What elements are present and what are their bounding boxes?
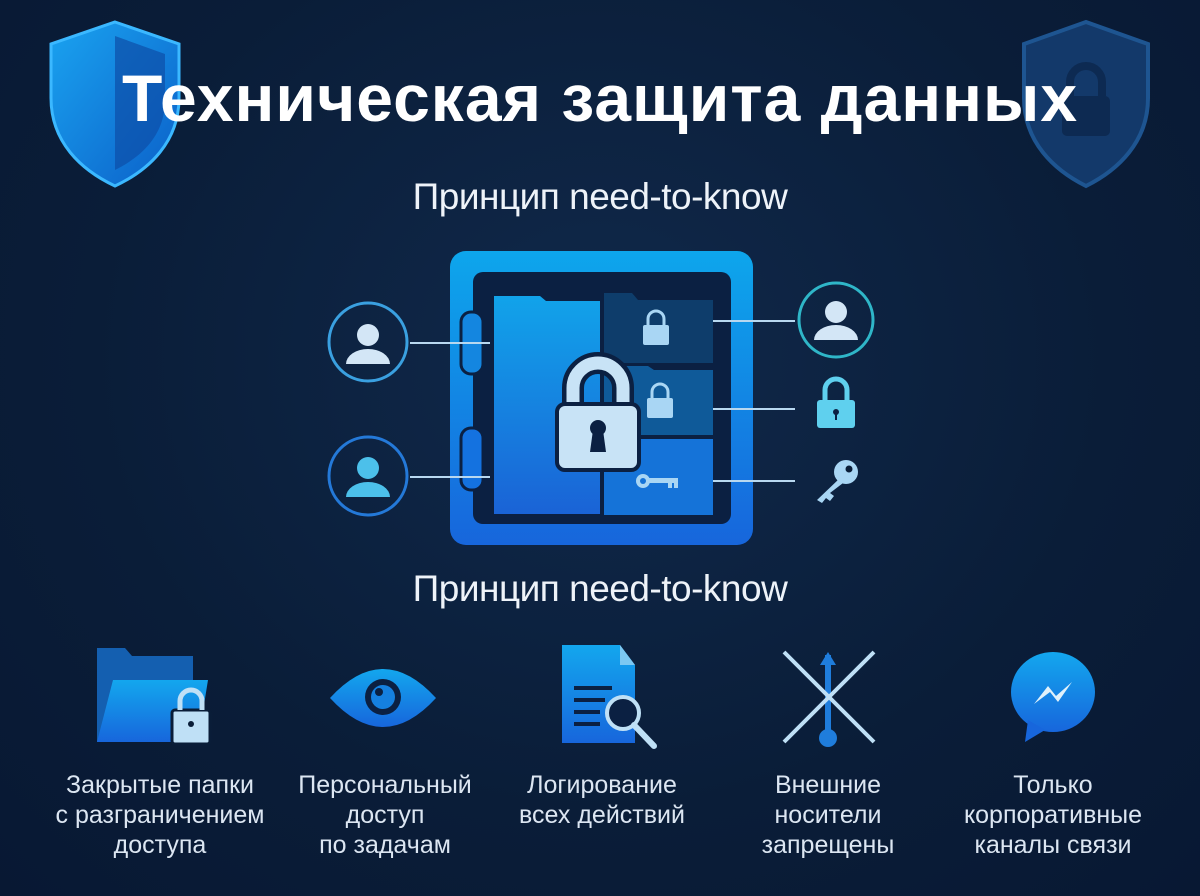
subtitle middle: Принцип need-to-know bbox=[413, 568, 787, 609]
user icons bbox=[329, 283, 873, 515]
right lock bbox=[817, 379, 855, 428]
label: external media bbox=[762, 771, 894, 859]
label: corporate channels: корпоративные bbox=[964, 801, 1142, 829]
label: corporate channels: Только bbox=[1013, 771, 1093, 799]
icon: document search bbox=[562, 645, 654, 746]
icon: messenger bubble bbox=[1011, 652, 1095, 742]
label: corporate channels bbox=[964, 771, 1142, 859]
icon: right shield with lock bbox=[1022, 20, 1150, 188]
icon: crossed usb bbox=[784, 652, 874, 747]
label: corporate channels: каналы связи bbox=[974, 831, 1132, 859]
label: external media: носители bbox=[774, 801, 881, 829]
label: personal access: по задачам bbox=[319, 831, 451, 859]
big padlock bbox=[573, 363, 623, 410]
label: closed folders: с разграничением bbox=[56, 801, 264, 829]
icon: eye bbox=[330, 669, 436, 727]
label: closed folders: Закрытые папки bbox=[66, 771, 254, 799]
label: logging: Логирование bbox=[527, 771, 677, 799]
label: external media: Внешние bbox=[775, 771, 881, 799]
label: closed folders bbox=[56, 771, 264, 859]
connector lines bbox=[410, 321, 795, 481]
label: personal access: доступ bbox=[346, 801, 424, 829]
icon: left shield bbox=[50, 20, 180, 188]
icon: folder with lock bbox=[97, 648, 210, 744]
subtitle top: Принцип need-to-know bbox=[413, 176, 787, 217]
label: logging: всех действий bbox=[519, 801, 685, 829]
label: personal access bbox=[298, 771, 472, 859]
label: external media: запрещены bbox=[762, 831, 894, 859]
label: closed folders: доступа bbox=[114, 831, 206, 859]
small key bbox=[636, 474, 678, 488]
small locks bbox=[643, 311, 673, 418]
label: logging bbox=[519, 771, 685, 829]
diagram: safe with access bbox=[328, 251, 874, 545]
title: Техническая защита данных bbox=[122, 61, 1078, 135]
label: personal access: Персональный bbox=[298, 771, 472, 799]
safe body bbox=[450, 251, 753, 545]
right key bbox=[817, 460, 858, 503]
feature icons row bbox=[97, 645, 1095, 749]
